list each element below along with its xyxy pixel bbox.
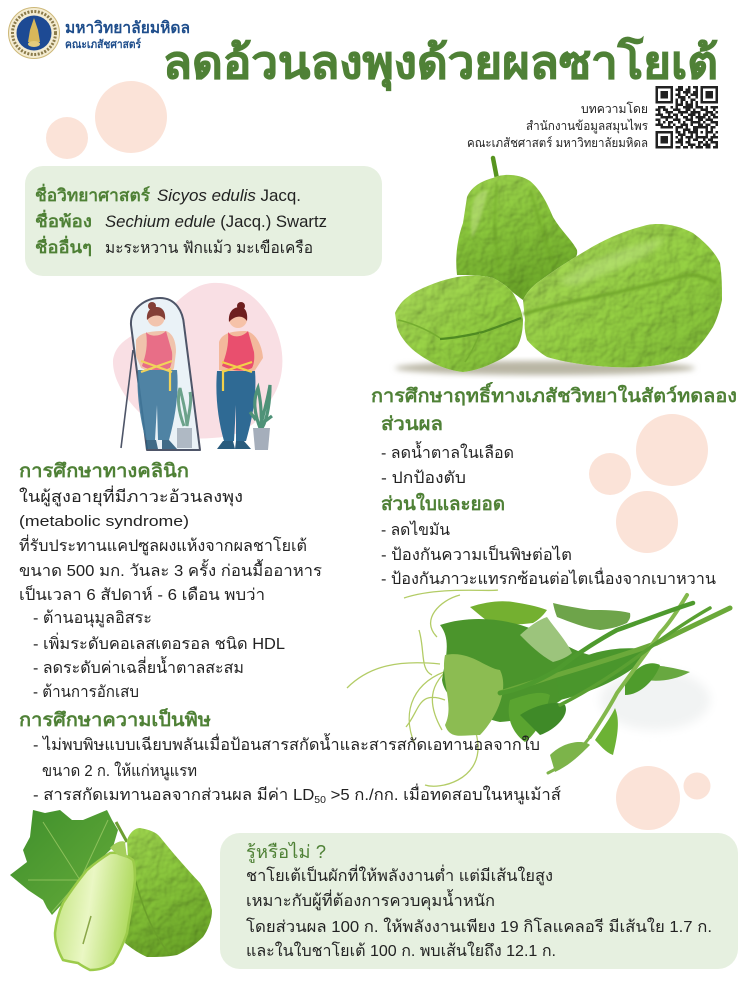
text block: fruit effects: - ลดน้ำตาลในเลือด: [381, 441, 514, 462]
text block: fruit effects: [381, 413, 514, 487]
panel: did you know: และในใบชาโยเต้ 100 ก. พบเส้นใยถึง 12.1 ก.: [246, 941, 556, 960]
other names: มะระหวาน ฟักแม้ว มะเขือเครือ: [105, 239, 313, 257]
text block: clinical study: - ลดระดับค่าเฉลี่ยน้ำตาลสะสม: [33, 656, 244, 677]
text block: fruit effects: ส่วนผล: [381, 413, 443, 434]
grape-like leaf: [10, 810, 118, 915]
scientific name: [35, 183, 301, 205]
heading: pharmacology studies in animals: การศึกษาฤทธิ์ทางเภสัชวิทยาในสัตว์ทดลอง: [371, 381, 737, 406]
text block: toxicity study: 50: [314, 795, 326, 806]
large right fruit: [523, 224, 722, 367]
university name: [65, 19, 190, 51]
article credit: [467, 101, 648, 150]
text block: clinical study: การศึกษาทางคลินิก: [19, 460, 189, 481]
university logo: [8, 8, 60, 58]
text block: leaf and shoot effects: - ป้องกันความเป็นพิษต่อไต: [381, 544, 572, 564]
QR code: [656, 87, 718, 147]
panel: did you know: เหมาะกับผู้ที่ต้องการควบคุมน้ำหนัก: [246, 889, 495, 911]
stems: [500, 595, 730, 773]
text block: leaf and shoot effects: [381, 492, 716, 588]
panel: did you know: [220, 833, 738, 969]
front leaf: [520, 617, 572, 662]
synonym: [35, 209, 327, 231]
small left fruit: [395, 276, 523, 372]
article credit: สำนักงานข้อมูลสมุนไพร: [526, 119, 648, 134]
text block: clinical study: - เพิ่มระดับคอเลสเตอรอล ชนิด HDL: [33, 632, 285, 653]
synonym: Sechium edule (Jacq.) Swartz: [105, 213, 327, 231]
text block: clinical study: เป็นเวลา 6 สัปดาห์ - 6 เดือน พบว่า: [19, 584, 265, 604]
illustration: woman measuring waist at mirror: [113, 283, 282, 450]
title: ลดอ้วนลงพุงด้วยผลซาโยเต้: [163, 36, 718, 91]
text block: toxicity study: การศึกษาความเป็นพิษ: [19, 707, 211, 730]
other names: [35, 235, 313, 257]
article credit: คณะเภสัชศาสตร์ มหาวิทยาลัยมหิดล: [467, 136, 648, 150]
scientific name: Sicyos edulis Jacq.: [157, 187, 301, 205]
text block: toxicity study: ขนาด 2 ก. ให้แก่หนูแรท: [42, 761, 197, 781]
article credit: บทความโดย: [581, 101, 648, 116]
text block: toxicity study: - ไม่พบพิษแบบเฉียบพลันเมื่อป้อนสารสกัดน้ำและสารสกัดเอทานอลจากใบ: [33, 733, 540, 754]
text block: clinical study: - ต้านการอักเสบ: [33, 683, 139, 701]
scientific name: ชื่อวิทยาศาสตร์: [35, 183, 150, 205]
synonym: ชื่อพ้อง: [35, 209, 92, 231]
university name: มหาวิทยาลัยมหิดล: [65, 19, 190, 37]
text block: leaf and shoot effects: - ป้องกันภาวะแทรกซ้อนต่อไตเนื่องจากเบาหวาน: [381, 567, 716, 588]
panel: plant names: [25, 166, 382, 276]
leaves behind stems: [440, 601, 690, 772]
decorative circles: [46, 81, 710, 830]
photo: chayote leaves and shoots: [347, 590, 730, 786]
text block: clinical study: ขนาด 500 มก. วันละ 3 ครั้ง ก่อนมื้ออาหาร: [19, 559, 322, 580]
cut half: [55, 853, 135, 970]
panel: did you know: ชาโยเต้เป็นผักที่ให้พลังงานต่ำ แต่มีเส้นใยสูง: [246, 864, 553, 886]
tendrils: [347, 590, 498, 786]
text block: clinical study: [19, 460, 322, 701]
text block: toxicity study: [19, 707, 561, 806]
text block: leaf and shoot effects: - ลดไขมัน: [381, 520, 450, 539]
text block: clinical study: (metabolic syndrome): [19, 513, 189, 530]
text block: clinical study: ที่รับประทานแคปซูลผงแห้งจากผลชาโยเต้: [19, 534, 307, 556]
photo: cut chayote with leaf: [10, 810, 212, 970]
panel: did you know: รู้หรือไม่ ?: [246, 841, 326, 863]
top fruit: [456, 158, 577, 300]
text block: clinical study: - ต้านอนุมูลอิสระ: [33, 609, 152, 628]
text block: leaf and shoot effects: ส่วนใบและยอด: [381, 492, 505, 514]
photo: chayote fruits: [395, 158, 722, 375]
university name: คณะเภสัชศาสตร์: [65, 37, 142, 51]
text block: fruit effects: - ปกป้องตับ: [381, 469, 466, 487]
text block: toxicity study: >5 ก./กก. เมื่อทดสอบในหนูเม้าส์: [326, 783, 561, 805]
other names: ชื่ออื่นๆ: [35, 235, 92, 257]
whole fruit: [116, 822, 127, 842]
text block: clinical study: ในผู้สูงอายุที่มีภาวะอ้วนลงพุง: [19, 485, 243, 507]
panel: did you know: โดยส่วนผล 100 ก. ให้พลังงานเพียง 19 กิโลแคลอรี มีเส้นใย 1.7 ก.: [246, 917, 712, 936]
text block: toxicity study: - สารสกัดเมทานอลจากส่วนผล มีค่า LD: [33, 787, 302, 804]
